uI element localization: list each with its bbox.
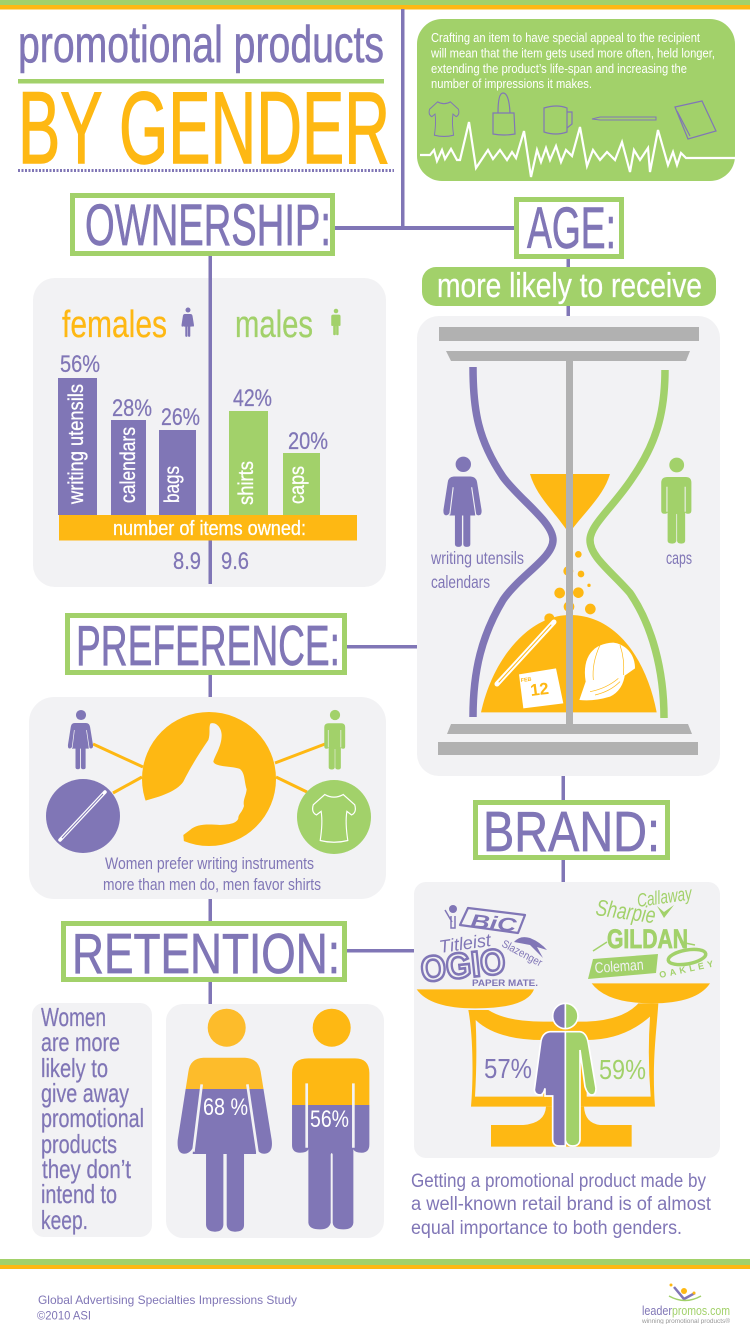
bar: bags 26%: bags xyxy=(161,466,184,503)
bar: writing utensils 56%: writing utensils xyxy=(65,384,88,505)
icon: t-shirt xyxy=(429,102,459,136)
bar: writing utensils 56% xyxy=(58,351,100,515)
brand caption: equal importance to both genders. xyxy=(411,1218,682,1239)
heading: preference: PREFERENCE: xyxy=(76,614,340,678)
heading: age xyxy=(516,196,622,261)
brand caption xyxy=(411,1171,712,1239)
source note: Global Advertising Specialties Impressions Study xyxy=(38,1293,297,1307)
female brand logos: Slazenger xyxy=(500,938,544,969)
male brand logos: Sharpie xyxy=(594,894,657,928)
heading: retention: RETENTION: xyxy=(72,922,340,986)
panel: age hourglass xyxy=(417,316,720,776)
strip: number of items owned: number of items owned: xyxy=(113,518,306,540)
icon: calendar xyxy=(519,668,563,708)
intro text: extending the product’s life-span and increasing the xyxy=(431,62,687,76)
intro text xyxy=(430,31,715,91)
icon: male figure xyxy=(661,458,691,544)
bar: calendars 28%: 28% xyxy=(112,395,152,422)
value: 57%: 57% xyxy=(484,1053,532,1084)
heading: ownership: OWNERSHIP: xyxy=(85,193,331,258)
icon: thumbs up xyxy=(138,712,276,846)
male brand logos: Callaway xyxy=(636,883,694,912)
male brand logos: GILDAN xyxy=(607,924,688,954)
label: female items xyxy=(430,548,524,592)
male brand logos: OAKLEY xyxy=(658,958,718,980)
panel: retention text: they don’t xyxy=(42,1154,132,1184)
heading: brand: BRAND: xyxy=(483,800,660,864)
female figure 68%: 68 % xyxy=(203,1094,248,1121)
heading: ownership xyxy=(72,193,332,258)
icon: pen xyxy=(592,117,656,120)
panel: retention text: promotional xyxy=(41,1103,144,1133)
preference caption xyxy=(103,854,321,894)
source note xyxy=(37,1293,297,1322)
bar: calendars 28%: calendars xyxy=(117,427,140,503)
panel: retention text: likely to xyxy=(41,1053,108,1083)
brand caption: a well-known retail brand is of almost xyxy=(411,1194,712,1215)
brand caption: Getting a promotional product made by xyxy=(411,1171,706,1192)
hourglass frame xyxy=(438,327,699,755)
banner: more likely to receive: more likely to receive xyxy=(437,267,702,305)
female brand logos: Titleist xyxy=(438,930,493,957)
label: males: males xyxy=(235,304,313,346)
icon: pen in sand xyxy=(497,622,554,684)
intro text: number of impressions it makes. xyxy=(431,77,592,91)
logo: leaderpromos: promos.com xyxy=(672,1303,730,1318)
intro text: will mean that the item gets used more often, held longer, xyxy=(430,46,715,60)
panel: retention text: keep. xyxy=(41,1205,88,1235)
panel: intro callout xyxy=(417,19,735,181)
panel: retention text: are more xyxy=(41,1027,120,1057)
panel: retention text: intend to xyxy=(41,1179,117,1209)
icon: male xyxy=(331,309,341,335)
heading: preference xyxy=(68,614,344,678)
preference caption: Women prefer writing instruments xyxy=(105,854,314,873)
male brand logos xyxy=(588,883,718,980)
intro text: Crafting an item to have special appeal to the recipient xyxy=(431,31,700,45)
label: female items: calendars xyxy=(431,572,490,592)
split figure xyxy=(534,1003,596,1146)
bar: caps 20%: caps xyxy=(286,466,309,504)
icon: shirt circle xyxy=(297,780,371,854)
logo: leaderpromos: leader xyxy=(642,1303,673,1318)
footer colour band xyxy=(0,1259,750,1269)
icon: pen circle xyxy=(46,779,120,853)
panel: retention text xyxy=(32,1002,152,1237)
icon: calendar: 12 xyxy=(529,679,550,700)
strip: number of items owned xyxy=(59,515,357,540)
icon: calendar: FEB xyxy=(521,677,532,684)
source note: ©2010 ASI xyxy=(37,1308,91,1322)
female figure 68% xyxy=(178,1009,272,1232)
sand xyxy=(481,474,657,712)
icon: tote bag xyxy=(493,93,515,135)
hourglass left wall xyxy=(473,367,553,717)
value: female items 8.9: 8.9 xyxy=(173,548,201,575)
heading: age: AGE: xyxy=(527,196,616,261)
panel: retention text: products xyxy=(41,1129,117,1159)
hourglass right wall xyxy=(590,370,665,718)
bar: shirts 42%: shirts xyxy=(235,461,258,505)
title xyxy=(18,16,394,185)
panel: ownership chart xyxy=(33,278,386,587)
icon: female xyxy=(182,307,194,337)
label: females: females xyxy=(62,304,167,346)
male brand logos: Coleman xyxy=(594,957,644,977)
connector lines xyxy=(93,744,325,793)
bar: bags 26% xyxy=(159,404,200,515)
icon: male xyxy=(324,710,345,769)
connector lines xyxy=(208,9,570,1004)
title: BY GENDER xyxy=(18,71,390,185)
preference caption: more than men do, men favor shirts xyxy=(103,875,321,894)
top colour band xyxy=(0,0,750,10)
icon: baseball cap xyxy=(579,643,635,700)
icon: female xyxy=(68,710,93,769)
female brand logos: PAPER MATE. xyxy=(472,978,538,989)
female brand logos: BiC xyxy=(469,911,518,937)
bar: shirts 42%: 42% xyxy=(233,385,272,412)
title: promotional products xyxy=(18,16,384,74)
bar: shirts 42% xyxy=(229,385,272,515)
female brand logos: OGIO xyxy=(419,940,507,990)
icon: notebook xyxy=(675,101,716,139)
icon: mug xyxy=(544,106,572,134)
value: male items 9.6: 9.6 xyxy=(221,548,249,575)
bar: caps 20%: 20% xyxy=(288,428,328,455)
logo: leaderpromos xyxy=(641,1284,730,1324)
label: male items: caps xyxy=(666,548,692,568)
male figure 56% xyxy=(292,1009,369,1229)
label: female items: writing utensils xyxy=(430,548,524,568)
panel: brand scale xyxy=(414,882,720,1158)
balance scale xyxy=(417,983,710,1147)
female brand logos xyxy=(419,905,547,990)
panel: retention text: give away xyxy=(41,1078,129,1108)
value: 59%: 59% xyxy=(599,1054,646,1085)
bar: calendars 28% xyxy=(111,395,152,515)
male figure 56%: 56% xyxy=(310,1106,349,1133)
heartbeat line xyxy=(420,122,735,177)
panel: retention figures xyxy=(166,1004,384,1238)
bar: bags 26%: 26% xyxy=(161,404,200,431)
panel: retention text: Women xyxy=(41,1002,106,1032)
panel: preference xyxy=(29,697,386,899)
bar: writing utensils 56%: 56% xyxy=(60,351,100,378)
bar: caps 20% xyxy=(283,428,328,515)
icon: female figure xyxy=(443,457,482,547)
